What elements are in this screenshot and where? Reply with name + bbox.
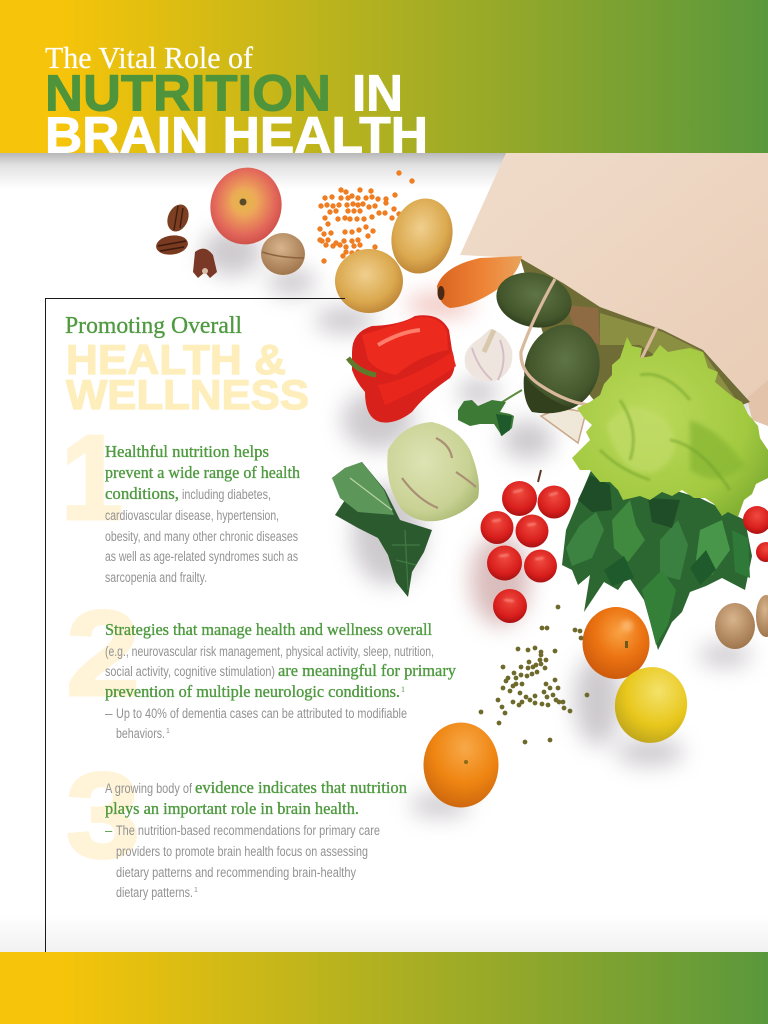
title: NUTRITION [45, 64, 331, 122]
panel heading: WELLNESS [66, 371, 309, 418]
text block 2 [105, 620, 457, 741]
text block 1: as well as age-related syndromes such as [105, 549, 298, 564]
mung beans [481, 607, 587, 742]
text block 3: 1 [194, 887, 198, 894]
icon: orange [582, 607, 650, 679]
text block 3: plays an important role in brain health. [105, 799, 359, 818]
text block 3: The nutrition-based recommendations for primary care [116, 823, 380, 838]
text block 1: Healthful nutrition helps [105, 442, 269, 461]
icon: parsley sprig [458, 390, 522, 436]
text block 2: prevention of multiple neurologic conditions. [105, 682, 400, 701]
text block 1: conditions, [105, 484, 179, 503]
icon: pecans [155, 201, 217, 278]
icon: lettuce [572, 337, 768, 517]
numeral 3: 3 [66, 747, 140, 883]
text block 3: providers to promote brain health focus on assessing [116, 844, 368, 859]
lentils [320, 173, 412, 261]
icon: kohlrabi greens [332, 462, 432, 597]
icon: walnuts [715, 595, 768, 649]
icon: cherry tomatoes [480, 470, 768, 623]
paper bag [460, 153, 768, 443]
icon: lemon [606, 659, 696, 751]
title [45, 40, 428, 164]
title: IN [352, 64, 403, 122]
text block 2: Up to 40% of dementia cases can be attributed to modifiable [116, 706, 407, 721]
text block 2: 1 [166, 728, 170, 735]
text block 2: – [105, 706, 113, 721]
text block 2: 1 [401, 685, 405, 694]
text block 1 [105, 442, 301, 585]
text block 3 [105, 778, 407, 900]
text block 3: evidence indicates that nutrition [195, 778, 407, 797]
photo: groceries spilling from paper bag [155, 153, 768, 817]
text block 3: A growing body of [105, 781, 192, 796]
footer band [0, 952, 768, 1024]
text block 1: prevent a wide range of health [105, 463, 301, 482]
title: The Vital Role of [45, 40, 254, 75]
icon: apple [203, 161, 289, 251]
text block 1: sarcopenia and frailty. [105, 570, 207, 585]
text block 1: cardiovascular disease, hypertension, [105, 508, 279, 523]
text block 2: Strategies that manage health and wellness overall [105, 620, 432, 639]
panel heading: Promoting Overall [65, 313, 242, 339]
panel: health and wellness [61, 313, 457, 900]
text block 2: social activity, cognitive stimulation) [105, 664, 275, 679]
icon: walnut [261, 233, 305, 275]
icon: red bell pepper [348, 315, 456, 423]
panel heading [65, 313, 309, 418]
icon: potatoes [335, 192, 461, 313]
panel heading: HEALTH & [66, 336, 286, 383]
panel frame [46, 298, 345, 952]
numeral 2: 2 [66, 585, 140, 721]
text block 2: behaviors. [116, 726, 165, 741]
text block 1: obesity, and many other chronic diseases [105, 529, 298, 544]
icon: parsley bunch [562, 468, 752, 650]
icon: garlic [465, 329, 512, 381]
icon: avocados [491, 266, 611, 421]
text block 3: – [105, 823, 113, 838]
text block 2: (e.g., neurovascular risk management, physical activity, sleep, nutrition, [105, 644, 434, 659]
icon: tangerine [424, 722, 498, 808]
icon: bag handle [521, 279, 657, 405]
icon: kohlrabi [387, 422, 479, 521]
text block 3: dietary patterns and recommending brain-healthy [116, 865, 356, 880]
text block 2: are meaningful for primary [278, 661, 457, 680]
text block 1: including diabetes, [182, 487, 271, 502]
header band [0, 0, 768, 164]
icon: carrot [437, 256, 522, 308]
title: BRAIN HEALTH [45, 106, 428, 164]
text block 3: dietary patterns. [116, 885, 193, 900]
numeral 1: 1 [61, 409, 123, 545]
